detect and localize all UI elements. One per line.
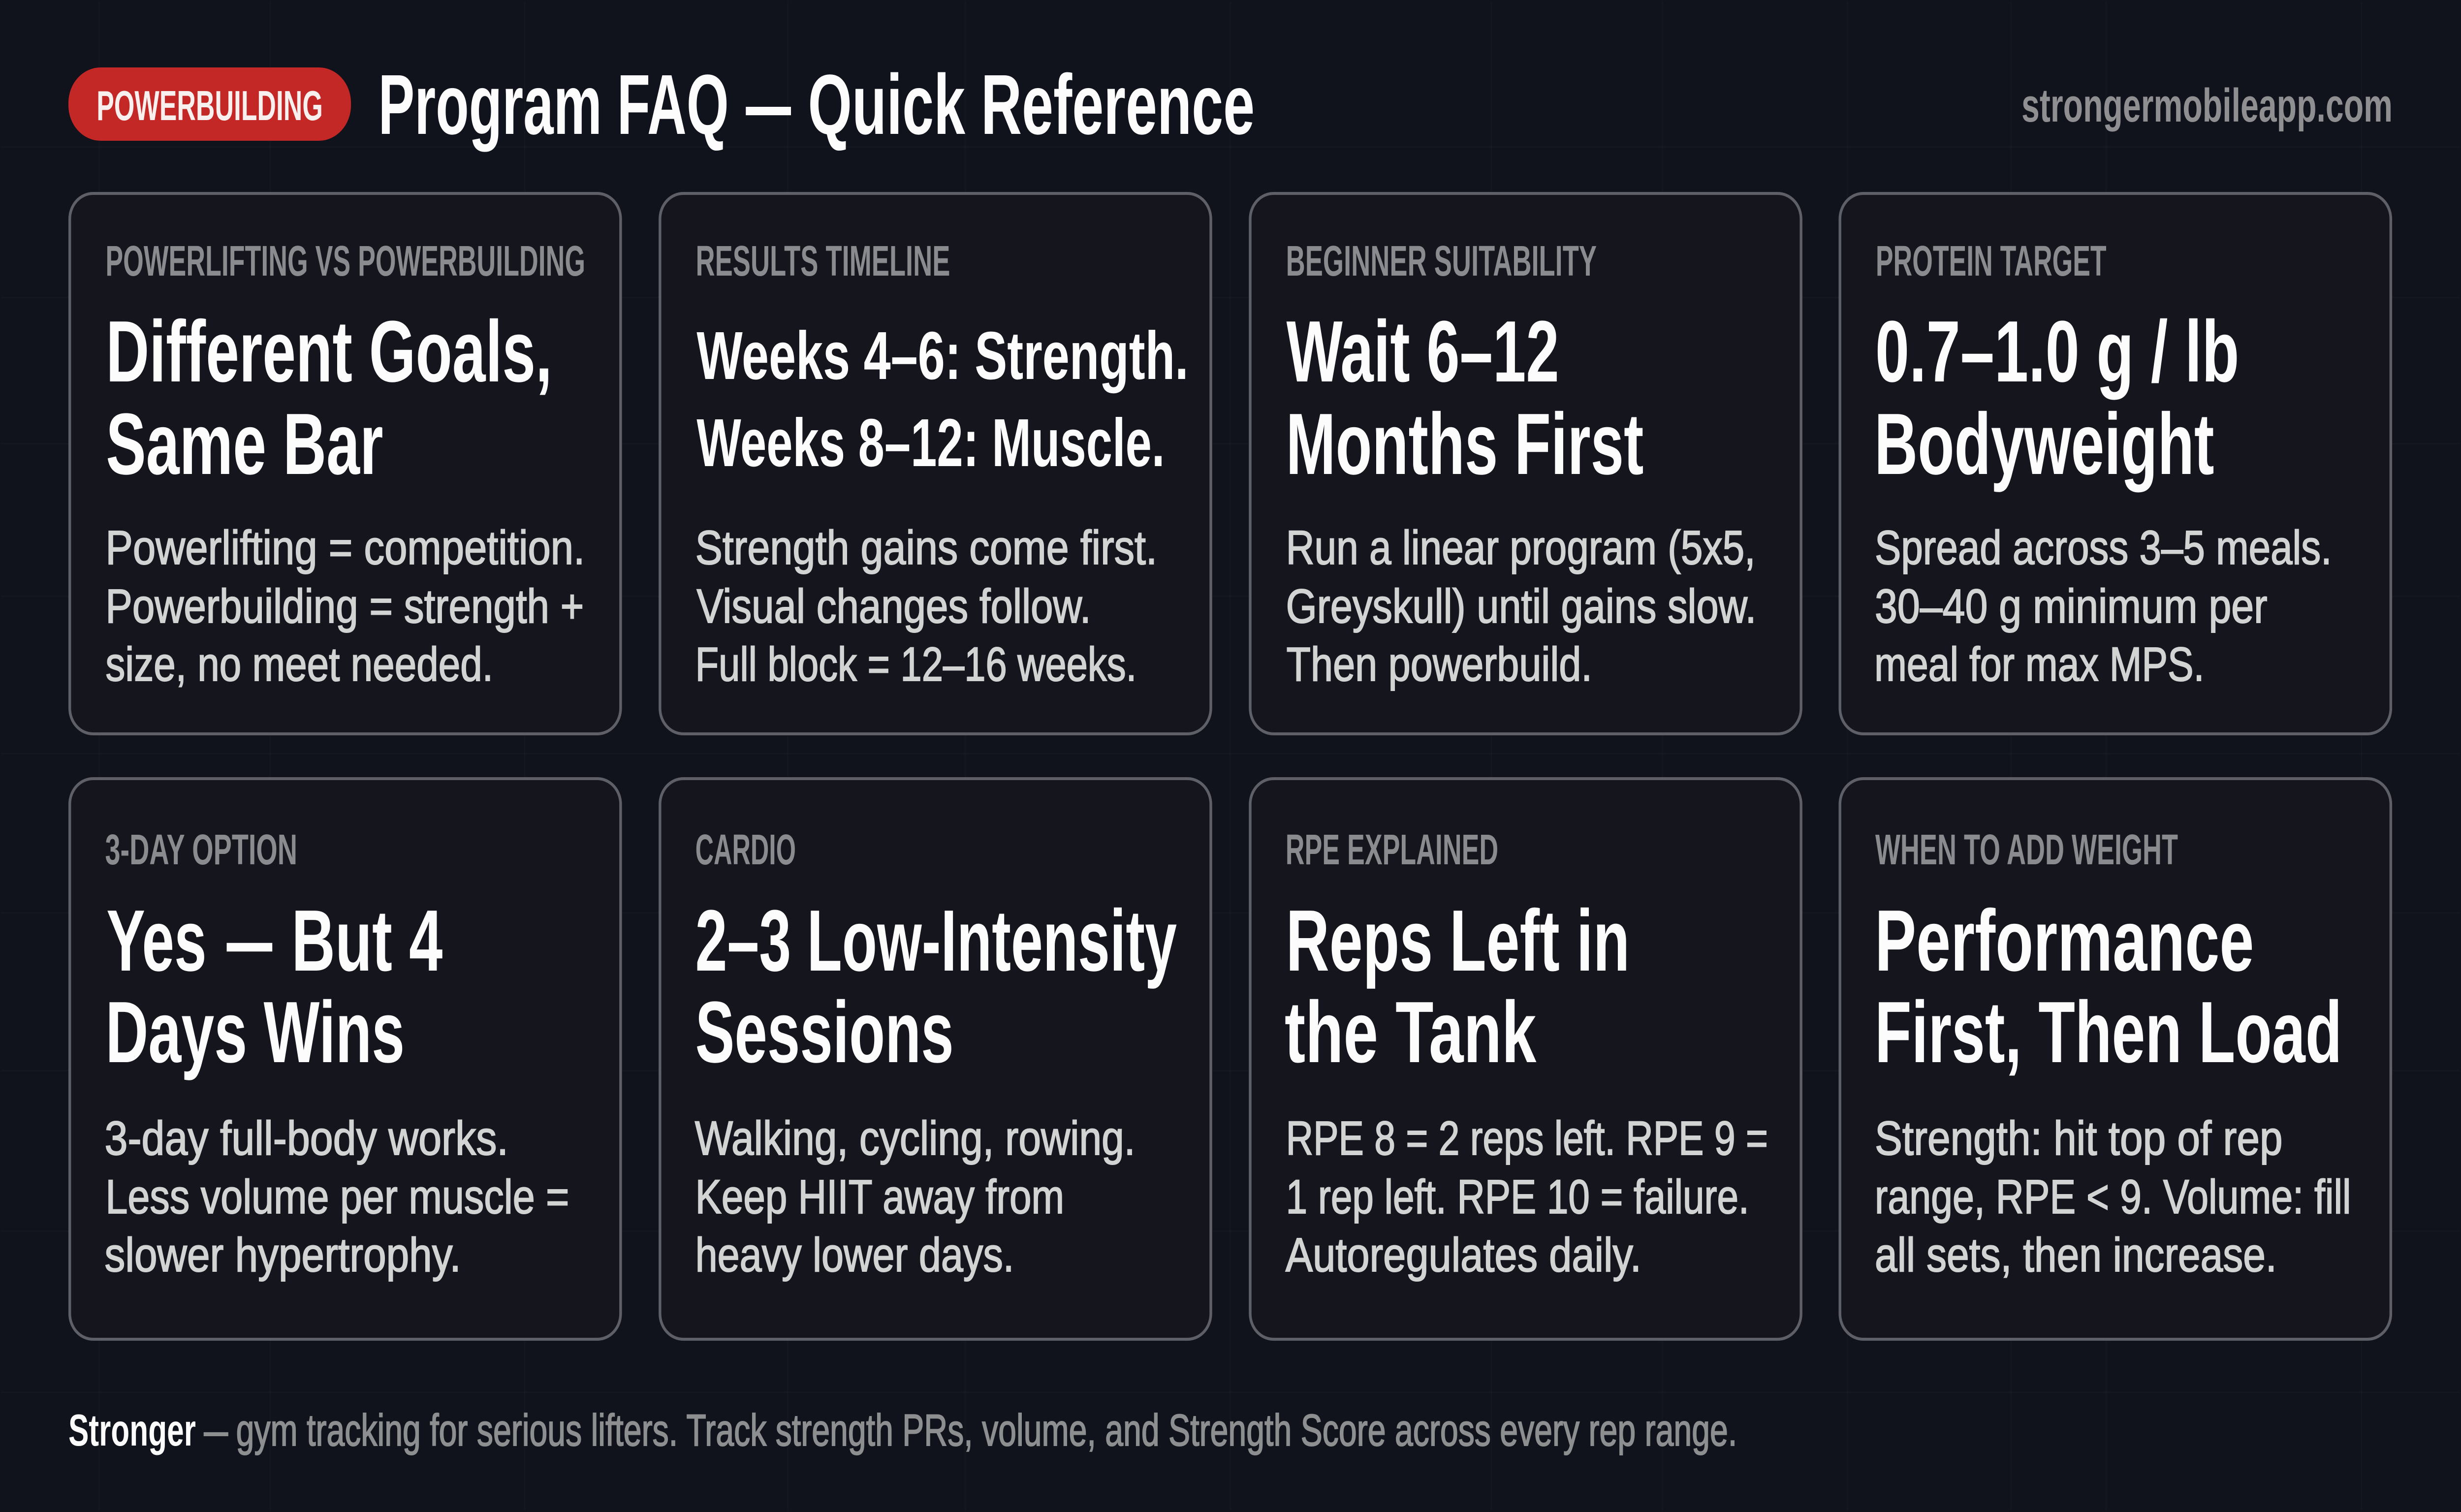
- label: POWERLIFTING VS POWERBUILDING: [105, 237, 585, 285]
- heading: Different Goals,: [106, 303, 552, 400]
- panel: results timeline: [660, 193, 1211, 734]
- badge: POWERBUILDING: [68, 67, 351, 141]
- heading: the Tank: [1285, 983, 1537, 1081]
- body text: [1286, 521, 1756, 691]
- body text: all sets, then increase.: [1875, 1228, 2277, 1282]
- heading: Days Wins: [105, 983, 405, 1081]
- heading: [1875, 892, 2342, 1081]
- body text: Autoregulates daily.: [1286, 1228, 1641, 1282]
- heading: Weeks 8–12: Muscle.: [696, 405, 1165, 480]
- body text: range, RPE < 9. Volume: fill: [1875, 1170, 2351, 1224]
- body text: Greyskull) until gains slow.: [1286, 579, 1756, 633]
- body text: Powerlifting = competition.: [105, 521, 585, 574]
- panel: protein target: [1840, 193, 2391, 734]
- heading: Sessions: [695, 983, 954, 1081]
- heading: [1285, 892, 1630, 1081]
- body text: RPE 8 = 2 reps left. RPE 9 =: [1286, 1111, 1768, 1165]
- heading: [105, 892, 442, 1081]
- heading: Bodyweight: [1874, 395, 2214, 493]
- panel: powerlifting vs powerbuilding: [70, 193, 621, 734]
- body text: [695, 1111, 1136, 1282]
- heading: But 4: [291, 892, 442, 989]
- heading: 2–3 Low-Intensity: [695, 892, 1177, 989]
- body text: Visual changes follow.: [696, 579, 1091, 633]
- body text: Powerbuilding = strength +: [105, 579, 584, 633]
- body text: [105, 1111, 569, 1282]
- panel: rpe explained: [1250, 779, 1801, 1339]
- body text: Then powerbuild.: [1287, 637, 1592, 691]
- heading: Weeks 4–6: Strength.: [696, 317, 1189, 393]
- label: WHEN TO ADD WEIGHT: [1875, 825, 2178, 874]
- heading: Wait 6–12: [1287, 303, 1559, 400]
- body text: size, no meet needed.: [105, 637, 493, 691]
- body text: Walking, cycling, rowing.: [695, 1111, 1136, 1165]
- heading: Performance: [1875, 892, 2254, 989]
- header: [68, 57, 2393, 153]
- label: 3-DAY OPTION: [105, 825, 297, 874]
- heading: Months First: [1286, 395, 1643, 493]
- title: Program FAQ: [379, 57, 729, 153]
- footer: [68, 1405, 1737, 1455]
- panel: 3-day option: [70, 779, 621, 1339]
- body text: Full block = 12–16 weeks.: [695, 637, 1136, 691]
- heading: [696, 317, 1189, 480]
- label: RESULTS TIMELINE: [696, 237, 950, 285]
- body text: Spread across 3–5 meals.: [1875, 521, 2332, 574]
- footer tagline: gym tracking for serious lifters. Track strength PRs, volume, and Strength Score across every rep range.: [236, 1405, 1737, 1455]
- heading: [1874, 303, 2239, 493]
- heading: Same Bar: [106, 395, 383, 493]
- label: BEGINNER SUITABILITY: [1286, 237, 1597, 285]
- body text: Less volume per muscle =: [105, 1170, 569, 1224]
- heading: [1286, 303, 1643, 493]
- heading: —: [227, 892, 273, 989]
- panel: when to add weight: [1840, 779, 2391, 1339]
- heading: [106, 303, 552, 493]
- body text: Strength: hit top of rep: [1875, 1111, 2283, 1165]
- heading: Yes: [106, 892, 207, 989]
- body text: Strength gains come first.: [695, 521, 1157, 574]
- body text: 1 rep left. RPE 10 = failure.: [1286, 1170, 1749, 1224]
- body text: heavy lower days.: [695, 1228, 1014, 1282]
- body text: Run a linear program (5x5,: [1286, 521, 1755, 574]
- heading: [695, 892, 1177, 1081]
- badge: POWERBUILDING: POWERBUILDING: [96, 83, 323, 129]
- body text: [1875, 1111, 2351, 1282]
- footer brand: Stronger: [68, 1405, 196, 1455]
- title: —: [746, 57, 791, 153]
- footer tagline: —: [204, 1405, 228, 1455]
- label: PROTEIN TARGET: [1876, 237, 2107, 285]
- body text: 3-day full-body works.: [105, 1111, 508, 1165]
- heading: 0.7–1.0 g / lb: [1875, 303, 2239, 400]
- body text: [695, 521, 1157, 691]
- body text: Keep HIIT away from: [695, 1170, 1064, 1224]
- body text: 30–40 g minimum per: [1875, 579, 2268, 633]
- title: Quick Reference: [808, 57, 1255, 153]
- body text: meal for max MPS.: [1874, 637, 2205, 691]
- heading: Reps Left in: [1286, 892, 1630, 989]
- title: [379, 57, 1255, 153]
- label: CARDIO: [695, 825, 796, 874]
- body text: slower hypertrophy.: [105, 1228, 461, 1282]
- label: RPE EXPLAINED: [1286, 825, 1498, 874]
- panel: cardio: [660, 779, 1211, 1339]
- panel: beginner suitability: [1250, 193, 1801, 734]
- body text: [105, 521, 585, 691]
- body text: [1874, 521, 2332, 691]
- body text: [1286, 1111, 1768, 1282]
